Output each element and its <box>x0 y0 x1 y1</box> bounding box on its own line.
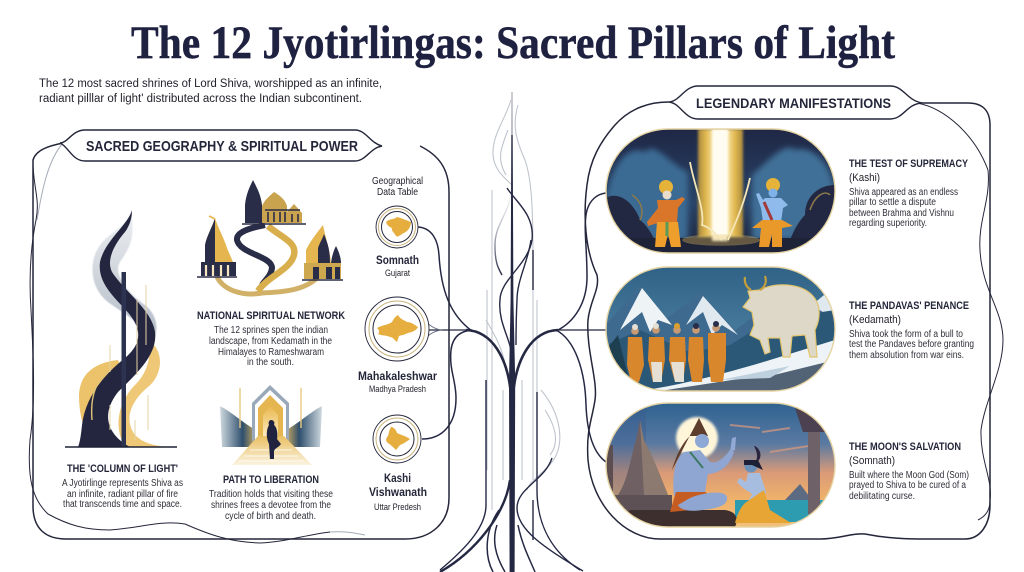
illustration: column of light <box>65 210 177 447</box>
text: pandavas penance: test the Pandaves before granting <box>849 339 974 350</box>
text: column of light: THE 'COLUMN OF LIGHT' <box>67 463 178 475</box>
label: Kashi Vishwanath: Uttar Predesh <box>374 502 421 512</box>
figure: Vishnu <box>752 178 793 247</box>
rock <box>628 510 736 526</box>
text: moons salvation: THE MOON'S SALVATION <box>849 441 961 453</box>
bottom gold arc <box>217 277 318 294</box>
label: Mahakaleshwar: Madhya Pradesh <box>369 384 426 394</box>
text: column of light: that transcends time and space. <box>63 499 182 510</box>
intro text: radiant pilllar of light' distributed across the Indian subcontinent. <box>39 93 362 105</box>
label: Mahakaleshwar <box>358 369 437 394</box>
heading: legendary manifestations: LEGENDARY MANIFESTATIONS <box>696 95 891 111</box>
text: geographical data table: Geographical <box>372 176 423 187</box>
scene: moons salvation <box>606 403 835 527</box>
winding roads <box>237 225 272 285</box>
text: column of light: A Jyotirlinge represents Shiva as <box>62 478 183 489</box>
text: test of supremacy <box>849 158 969 229</box>
text: national spiritual network: The 12 sprines spen the indian <box>214 325 328 336</box>
text: path to liberation: shrines frees a devotee from the <box>211 500 331 511</box>
intro text <box>39 78 382 105</box>
text: pandavas penance: Shiva took the form of a bull to <box>849 329 963 340</box>
text: national spiritual network: NATIONAL SPIRITUAL NETWORK <box>197 310 345 322</box>
figure: Shiva <box>670 418 736 512</box>
text: national spiritual network: landscape, from Kedamath in the <box>209 336 332 347</box>
text: national spiritual network: in the south. <box>247 357 294 368</box>
label: Somnath: Gujarat <box>385 268 410 278</box>
text: geographical data table: Data Table <box>377 187 418 198</box>
text: pandavas penance <box>849 300 974 361</box>
panel: legendary manifestations <box>585 86 1003 539</box>
illustration: path to liberation gate <box>220 385 322 465</box>
left temple <box>197 216 237 277</box>
bull <box>743 276 819 357</box>
heading: legendary manifestations <box>668 86 922 119</box>
text: moons salvation: (Somnath) <box>849 455 895 467</box>
figures: pandavas <box>627 321 726 382</box>
left branch <box>418 227 511 439</box>
heading: sacred geography <box>60 130 382 161</box>
pillar <box>808 430 820 514</box>
text: pandavas penance: (Kedamath) <box>849 314 901 326</box>
text: geographical data table <box>372 176 423 198</box>
panel: sacred geography <box>29 130 449 543</box>
label: Kashi Vishwanath: Kashi <box>384 471 411 485</box>
label: Kashi Vishwanath: Vishwanath <box>369 485 427 499</box>
label: Mahakaleshwar: Mahakaleshwar <box>358 369 437 383</box>
text: national spiritual network: Himalayes to Rameshwaram <box>218 347 324 358</box>
figure: Brahma <box>647 180 685 247</box>
trunk <box>509 92 515 572</box>
text: national spiritual network <box>197 310 345 368</box>
temple <box>618 420 668 495</box>
text: test of supremacy: pillar to settle a dispute <box>849 197 936 208</box>
label: Kashi Vishwanath <box>369 471 427 512</box>
title: The 12 Jyotirlingas: Sacred Pillars of Light <box>131 17 895 69</box>
text: test of supremacy: between Brahma and Vishnu <box>849 208 954 219</box>
right temple <box>302 225 343 280</box>
text: column of light: an infinite, radiant pillar of fire <box>67 489 178 500</box>
text: column of light <box>62 463 183 510</box>
text: path to liberation: PATH TO LIBERATION <box>223 474 319 486</box>
scene: pandavas penance <box>606 267 835 391</box>
figure: moon god <box>735 446 791 523</box>
text: moons salvation: Built where the Moon God (Som) <box>849 470 969 481</box>
lower roots <box>440 480 535 572</box>
central tree of light <box>418 90 606 572</box>
medallion: Somnath <box>376 206 418 248</box>
heading: sacred geography: SACRED GEOGRAPHY & SPIRITUAL POWER <box>86 138 358 155</box>
label: Somnath: Somnath <box>376 253 419 267</box>
text: pandavas penance: THE PANDAVAS' PENANCE <box>849 300 969 312</box>
text: path to liberation <box>209 474 333 522</box>
text: test of supremacy: (Kashi) <box>849 172 880 184</box>
medallion: Mahakaleshwar <box>365 297 429 361</box>
text: test of supremacy: THE TEST OF SUPREMACY <box>849 158 969 170</box>
illustration: temples and paths <box>197 180 343 294</box>
top temple <box>242 180 306 224</box>
text: moons salvation <box>849 441 969 502</box>
intro text: The 12 most sacred shrines of Lord Shiva, worshipped as an infinite, <box>39 78 382 90</box>
text: pandavas penance: them absolution from war eins. <box>849 350 964 361</box>
scene: test of supremacy <box>606 129 835 253</box>
label: Somnath <box>376 253 419 278</box>
text: test of supremacy: regarding superiority. <box>849 218 927 229</box>
text: path to liberation: cycle of birth and death. <box>225 511 316 522</box>
text: path to liberation: Tradition holds that visiting these <box>209 489 333 500</box>
text: moons salvation: debilitating curse. <box>849 491 915 502</box>
medallion: Kashi Vishwanath <box>373 415 421 463</box>
text: moons salvation: prayed to Shiva to be cured of a <box>849 480 966 491</box>
text: test of supremacy: Shiva appeared as an endless <box>849 187 958 198</box>
right branch <box>513 193 606 462</box>
